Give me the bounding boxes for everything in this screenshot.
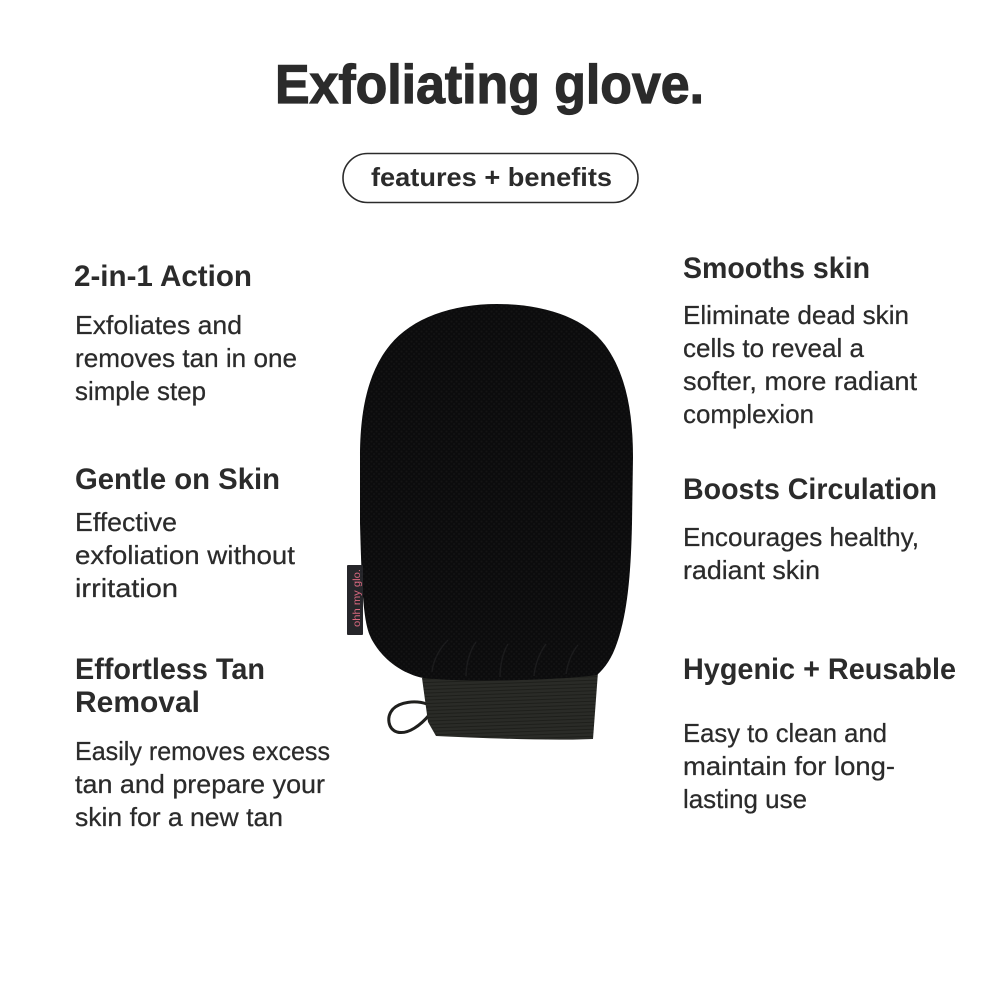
feature: Boosts Circulation: Boosts Circulation: [683, 473, 937, 506]
feature: Hygenic + Reusable: Hygenic + Reusable: [683, 653, 956, 686]
feature: Effortless Tan Removal: skin for a new tan: [75, 802, 283, 832]
glove label tag: ohh my glo.: [352, 569, 363, 627]
feature: 2-in-1 Action: 2-in-1 Action: [74, 260, 252, 293]
subtitle pill: features + benefits: [371, 162, 612, 192]
feature: Boosts Circulation: Encourages healthy,: [683, 522, 919, 552]
feature: Gentle on Skin: irritation: [75, 573, 178, 603]
feature: Boosts Circulation: [683, 473, 937, 585]
feature: Smooths skin: Smooths skin: [683, 252, 870, 285]
glove label tag: [347, 565, 363, 635]
feature: Smooths skin: Eliminate dead skin: [683, 300, 909, 330]
feature: Hygenic + Reusable: lasting use: [683, 784, 807, 814]
glove hanging loop: [389, 702, 430, 733]
glove body: [360, 304, 633, 681]
feature: Hygenic + Reusable: Easy to clean and: [683, 718, 887, 748]
glove gathers: [432, 640, 578, 677]
feature: Effortless Tan Removal: Easily removes excess: [75, 736, 330, 766]
feature: Smooths skin: complexion: [683, 399, 814, 429]
feature: Gentle on Skin: exfoliation without: [75, 540, 296, 570]
feature: Smooths skin: cells to reveal a: [683, 333, 865, 363]
feature: Gentle on Skin: Gentle on Skin: [75, 463, 280, 496]
feature: Boosts Circulation: radiant skin: [683, 555, 820, 585]
feature: Gentle on Skin: Effective: [75, 507, 177, 537]
feature: 2-in-1 Action: simple step: [75, 376, 206, 406]
subtitle pill: [343, 154, 638, 202]
title: Exfoliating glove.: [275, 53, 704, 115]
feature: Effortless Tan Removal: tan and prepare your: [75, 769, 325, 799]
feature: Smooths skin: [683, 252, 918, 429]
feature: Hygenic + Reusable: [683, 653, 956, 814]
product image: exfoliating glove: [347, 304, 633, 740]
feature: 2-in-1 Action: Exfoliates and: [75, 310, 242, 340]
feature: Gentle on Skin: [75, 463, 296, 603]
feature: Effortless Tan Removal: Removal: [75, 686, 200, 719]
feature: 2-in-1 Action: [74, 260, 297, 406]
feature: Effortless Tan Removal: [75, 653, 330, 832]
feature: Smooths skin: softer, more radiant: [683, 366, 918, 396]
feature: 2-in-1 Action: removes tan in one: [75, 343, 297, 373]
feature: Hygenic + Reusable: maintain for long-: [683, 751, 895, 781]
glove wrist band: [422, 672, 598, 740]
feature: Effortless Tan Removal: Effortless Tan: [75, 653, 265, 686]
